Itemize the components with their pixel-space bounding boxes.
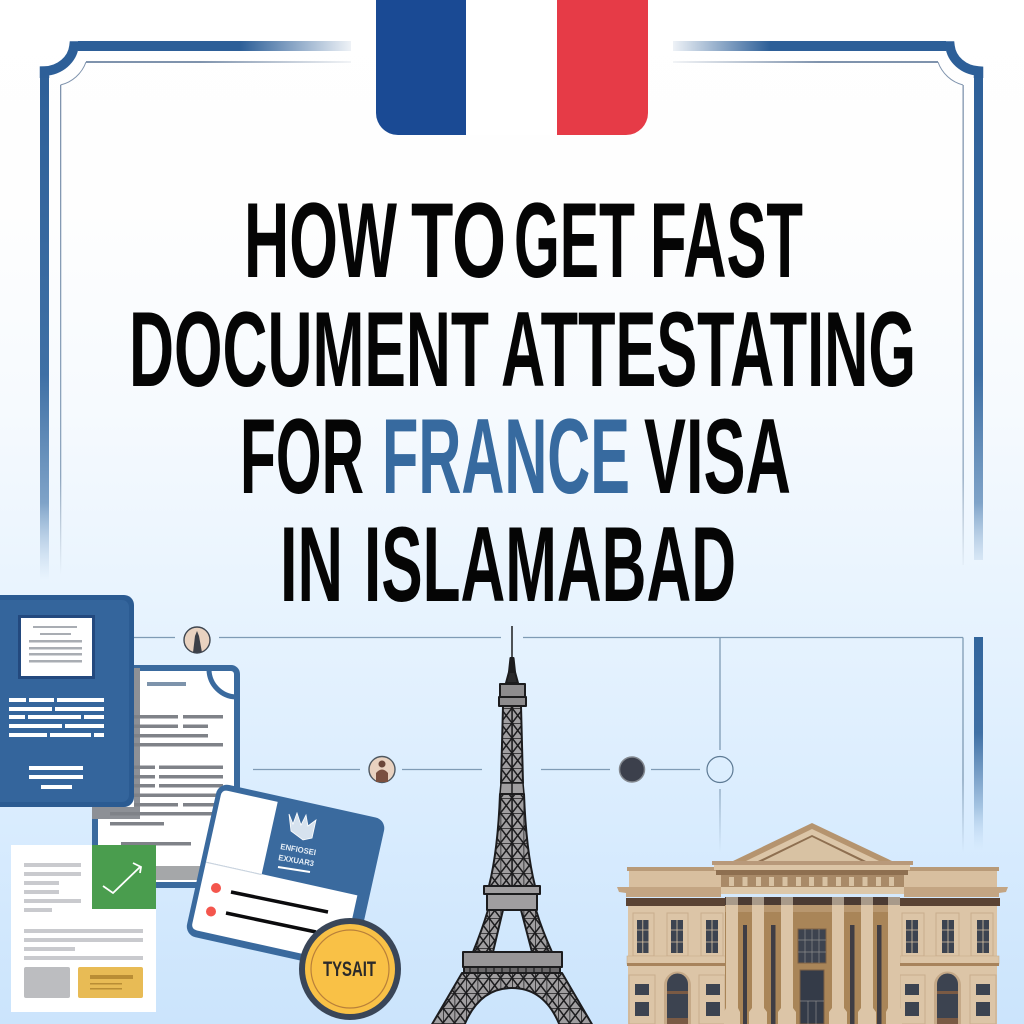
title: FOR [240, 396, 364, 516]
museum building [617, 823, 1008, 1024]
title: GET [514, 180, 635, 300]
column capitals [726, 897, 900, 905]
emblem [289, 813, 316, 840]
dark node [620, 757, 644, 782]
document: approved form with check [11, 845, 156, 1012]
title: IN [280, 504, 343, 624]
lower right frame bar [974, 637, 983, 850]
lower windows [635, 984, 990, 1016]
empty node [707, 756, 733, 782]
document: blue booklet [0, 595, 134, 807]
title: VISA [644, 396, 791, 516]
title: HOW [244, 180, 397, 300]
title: ISLAMABAD [364, 504, 736, 624]
green check badge [92, 845, 156, 909]
columns [724, 897, 902, 1024]
eiffel tower [431, 626, 593, 1024]
card label: ENFIOSEI [280, 842, 317, 857]
avatar node 1 [184, 627, 210, 653]
entablature [712, 861, 913, 894]
gold seal: TYSAIT [323, 958, 376, 981]
card label: EXXUAR3 [278, 853, 315, 868]
french flag [376, 0, 648, 135]
avatar node 2 [369, 756, 395, 782]
title: FRANCE [382, 396, 630, 516]
decorative frame [40, 41, 983, 580]
title: FAST [650, 180, 803, 300]
title: DOCUMENT [129, 289, 489, 409]
side wings [617, 867, 1008, 1024]
passport card [185, 783, 386, 972]
pediment [733, 823, 892, 861]
document: paper with folded corner [92, 668, 237, 885]
center portico [725, 897, 900, 1024]
title [129, 180, 916, 624]
gold seal [302, 921, 398, 1017]
arched doors [664, 972, 961, 1024]
card label [278, 842, 317, 868]
connector lines [134, 638, 963, 852]
upper windows [637, 920, 989, 953]
title: TO [411, 180, 506, 300]
